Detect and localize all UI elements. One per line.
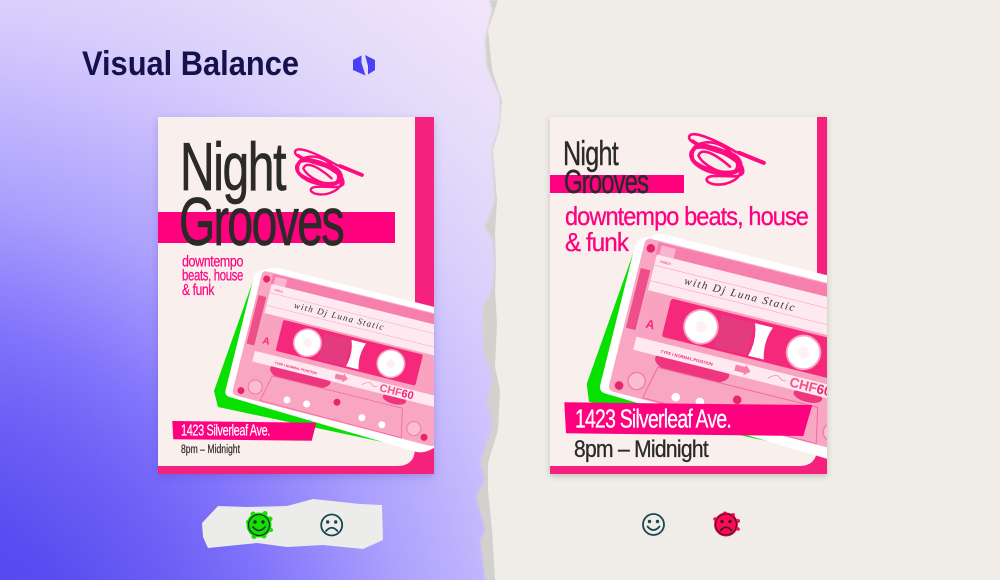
green accent shape <box>587 248 807 450</box>
cassette tape: with Dj Luna Static <box>683 275 796 314</box>
scribble <box>295 149 362 194</box>
cassette tape: A <box>261 336 271 348</box>
green accent shape <box>214 278 392 444</box>
icon: green smiley selected <box>246 511 273 539</box>
address banner: 1423 Silverleaf Ave. <box>181 423 270 440</box>
cassette tape: with Dj Luna Static <box>293 300 385 332</box>
title: Visual Balance <box>82 45 299 83</box>
cassette tape: INDEX <box>274 288 284 294</box>
heading: Night: Night <box>180 129 286 205</box>
subtitle <box>182 254 243 299</box>
highlight bar <box>158 212 395 243</box>
cassette tape: TYPE I NORMAL POSITION <box>660 349 713 367</box>
subtitle: downtempo beats, house <box>565 201 808 231</box>
icon: brand logo <box>353 55 375 76</box>
address banner: 1423 Silverleaf Ave. <box>575 404 731 434</box>
subtitle: & funk <box>182 282 215 299</box>
scribble <box>689 134 764 185</box>
heading: Night: Night <box>563 135 619 173</box>
panel: unbalanced poster <box>548 116 830 478</box>
cassette tape <box>600 234 827 459</box>
panel: balanced poster <box>154 116 438 480</box>
heading: Grooves: Grooves <box>179 184 343 260</box>
highlight bar <box>550 175 684 193</box>
subtitle: beats, house <box>182 268 243 285</box>
poster frame <box>158 117 434 474</box>
subtitle: downtempo <box>182 254 243 270</box>
cassette tape: INDEX <box>660 260 672 266</box>
subtitle: & funk <box>565 227 630 257</box>
subtitle <box>565 201 808 257</box>
time: 8pm – Midnight <box>181 444 241 456</box>
cassette tape <box>225 267 434 452</box>
icon: happy face <box>643 514 664 535</box>
poster cream background <box>158 117 415 466</box>
cassette tape: CHF60 <box>788 374 833 399</box>
icon: sad face <box>321 514 342 536</box>
poster frame <box>550 117 827 474</box>
poster cream background <box>550 117 817 466</box>
cassette tape: TYPE I NORMAL POSITION <box>274 361 318 376</box>
torn paper divider <box>476 0 1000 580</box>
background: purple gradient paper <box>0 0 520 580</box>
time: 8pm – Midnight <box>574 436 709 463</box>
cassette tape: CHF60 <box>378 382 415 402</box>
heading: Grooves: Grooves <box>564 163 649 200</box>
torn paper label behind icons <box>202 499 383 549</box>
icon: red sad face selected <box>713 512 740 536</box>
cassette tape: A <box>644 317 656 332</box>
